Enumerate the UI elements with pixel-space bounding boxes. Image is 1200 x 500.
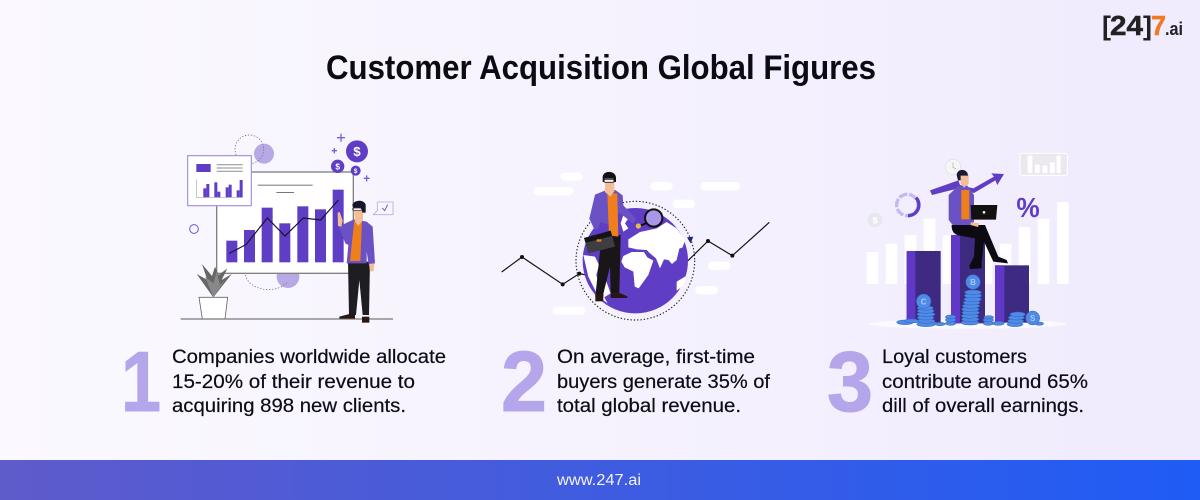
icon: dollar coins: $	[335, 161, 340, 171]
title: Customer Acquisition Global Figures	[326, 49, 876, 87]
magnifying glass	[636, 209, 662, 229]
stat 3	[827, 335, 1088, 430]
stat 3 text: dill of overall earnings.	[882, 396, 1084, 417]
chart board	[217, 172, 353, 273]
stat 2 text: total global revenue.	[557, 396, 741, 417]
plant	[197, 264, 232, 319]
stat 3 text: contribute around 65%	[882, 372, 1088, 393]
icon: dollar coins	[331, 134, 370, 181]
ground ellipse	[869, 319, 1066, 329]
stat 1	[121, 335, 446, 430]
percent sign: %	[1016, 192, 1040, 223]
stat 1 text: 15-20% of their revenue to	[172, 372, 415, 393]
icon: dollar coins: $	[353, 144, 361, 159]
stat 2 text: buyers generate 35% of	[557, 372, 771, 393]
illustration: presenter with chart board	[181, 134, 393, 323]
footer bar: www.247.ai	[556, 472, 641, 489]
logo: 24/7.ai	[1102, 10, 1183, 41]
number 3: 3	[827, 335, 873, 430]
icon: dollar coins: $	[354, 168, 358, 175]
icons: clock, coin, chart card: $	[872, 215, 877, 225]
stat 2 text	[557, 347, 771, 417]
logo: 24/7.ai: 24	[1110, 10, 1143, 41]
speech bubble	[373, 202, 393, 215]
illustration: person on bars with coins	[867, 153, 1069, 329]
footer bar	[0, 460, 1200, 500]
coin stacks	[897, 275, 1044, 327]
decorative circles	[190, 135, 299, 290]
stat 1 text: acquiring 898 new clients.	[172, 396, 406, 417]
illustration: person with globe	[502, 172, 769, 320]
stat 3 text	[882, 347, 1088, 417]
standing person with briefcase	[584, 172, 636, 301]
ground line	[181, 318, 393, 320]
illustration: person on bars with coins: B	[970, 278, 976, 287]
stat 2 text: On average, first-time	[557, 347, 755, 368]
icon: donut chart	[897, 194, 919, 216]
presenter figure	[338, 201, 375, 323]
stat 2	[501, 335, 771, 430]
white background bars	[867, 202, 1069, 284]
logo: 24/7.ai: 7	[1151, 10, 1166, 41]
person with laptop	[949, 170, 1008, 269]
icons: clock, coin, chart card	[868, 153, 1067, 227]
arrow	[930, 173, 1004, 195]
stat 3 text: Loyal customers	[882, 347, 1027, 368]
illustration: person on bars with coins: C	[921, 297, 927, 306]
globe	[576, 201, 695, 320]
stat 1 text: Companies worldwide allocate	[172, 347, 446, 368]
number 1: 1	[121, 335, 161, 430]
stat 1 text	[172, 347, 446, 417]
illustration: person on bars with coins: S	[1030, 314, 1036, 323]
logo: 24/7.ai: .ai	[1165, 19, 1183, 39]
trend line	[502, 222, 769, 286]
small report panel	[188, 156, 251, 206]
logo: 24/7.ai: [	[1102, 11, 1111, 41]
clouds	[534, 173, 740, 315]
logo: 24/7.ai: ]	[1143, 11, 1152, 41]
purple columns	[907, 235, 1029, 323]
number 2: 2	[501, 335, 547, 430]
